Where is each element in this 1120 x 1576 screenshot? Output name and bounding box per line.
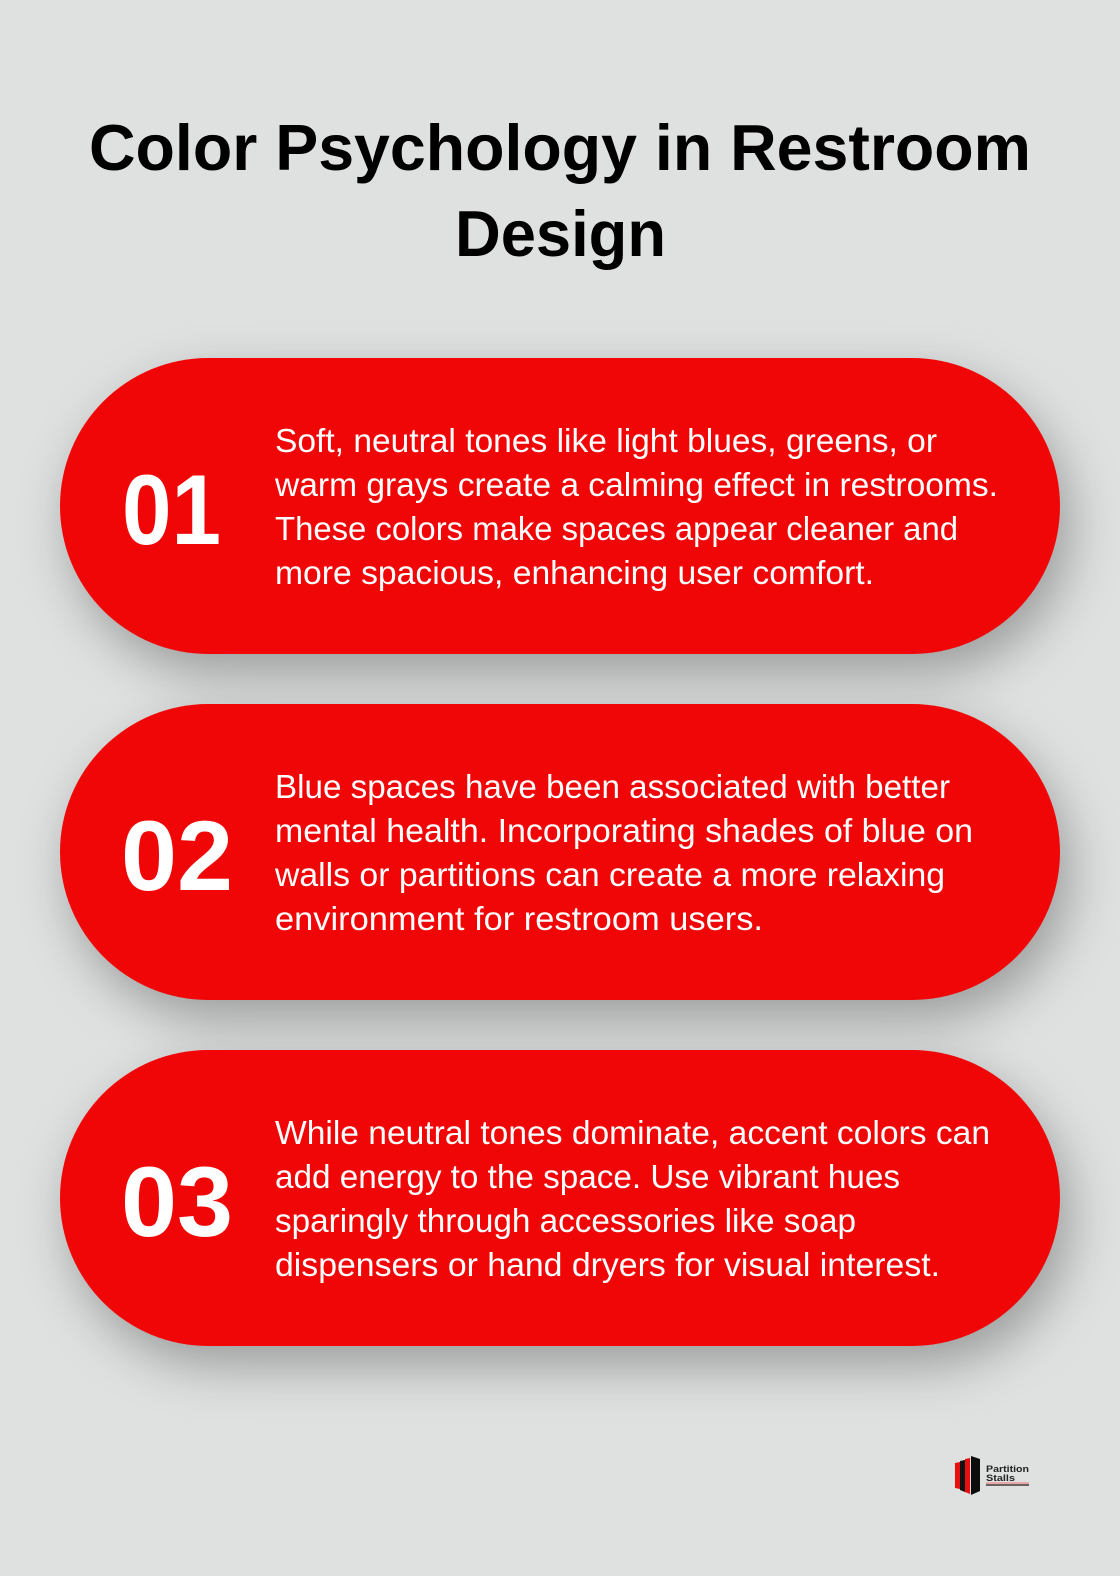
panel: card 01 [60,358,1060,654]
pill background 03 [60,1050,1060,1346]
text block 03: add energy to the space. Use vibrant hues [275,1159,900,1196]
icon: Partition Stalls logo: Partition [986,1464,1029,1475]
text block 03: While neutral tones dominate, accent colors can [275,1115,990,1152]
icon: Partition Stalls logo [955,1456,1029,1495]
icon: Partition Stalls logo: Stalls [986,1473,1015,1484]
title: Design [455,197,666,270]
text block 02: walls or partitions can create a more relaxing [274,857,945,894]
title [89,111,1031,270]
text block 02: mental health. Incorporating shades of blue on [275,813,973,850]
pill background 01 [60,358,1060,654]
text block 01: Soft, neutral tones like light blues, greens, or [275,423,937,460]
text block 02: environment for restroom users. [275,901,763,938]
text block 03: sparingly through accessories like soap [275,1203,856,1240]
number 01: 01 [122,454,221,565]
panel: card 03 [60,1050,1060,1346]
text block 02 [274,769,973,938]
panel: card 02 [60,704,1060,1000]
text block 02: Blue spaces have been associated with better [275,769,950,806]
title: Color Psychology in Restroom [89,111,1031,184]
text block 01: These colors make spaces appear cleaner and [275,511,958,548]
text block 03 [275,1115,990,1284]
number 02: 02 [121,800,233,911]
number 03: 03 [121,1146,233,1257]
pill background 02 [60,704,1060,1000]
text block 03: dispensers or hand dryers for visual interest. [275,1247,940,1284]
text block 01: more spacious, enhancing user comfort. [275,555,874,592]
text block 01 [274,423,998,592]
text block 01: warm grays create a calming effect in restrooms. [274,467,998,504]
